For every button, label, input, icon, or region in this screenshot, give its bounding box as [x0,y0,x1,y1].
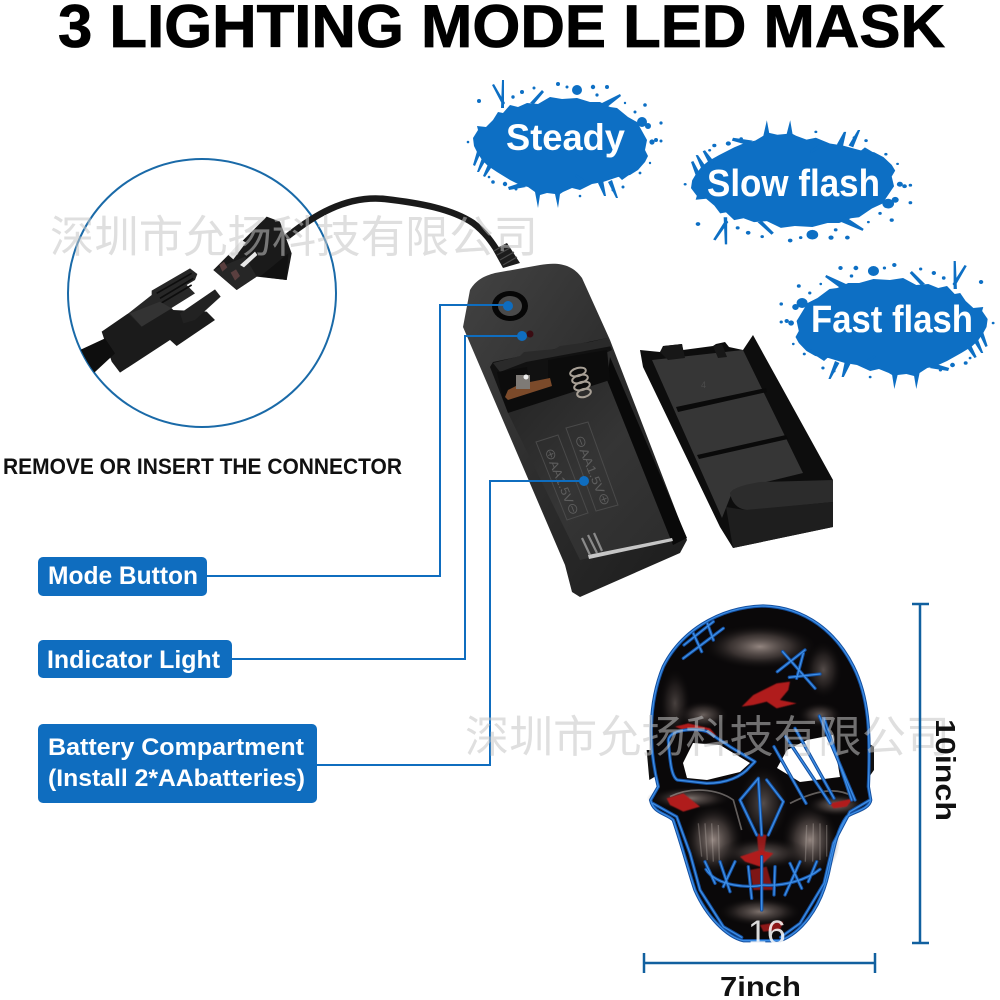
height label: 10inch [930,719,961,821]
watermark: bottom: 深圳市允扬科技有限公司 [465,713,950,762]
battery polarity markings: ⊕AA1.5V⊖ [541,446,581,518]
watermark: top: 深圳市允扬科技有限公司 [50,213,538,262]
icon: steady splat badge: Steady [506,117,625,158]
icon: slow flash splat badge [684,120,912,244]
icon: slow flash splat badge: Slow flash [707,163,880,205]
icon: mode button [492,291,528,321]
callout: indicator light label: Indicator Light [47,646,221,674]
battery box [463,264,687,597]
icon: male connector plug [80,268,221,377]
battery cover lid [640,335,833,548]
battery compartment cavity [508,380,673,560]
callout: battery compartment label [38,724,317,803]
battery contacts and spring [516,366,673,559]
icon: fast flash splat badge: Fast flash [811,299,973,341]
connector callout circle [68,159,336,427]
callout: battery compartment label: (Install 2*AAbatteries) [48,765,305,792]
icon: indicator LED [526,330,534,338]
battery polarity markings [536,422,618,520]
battery cover lid: 4 [701,380,706,390]
width dimension line [644,953,875,973]
arrow: battery compartment leader [317,476,589,765]
icon: steady splat badge [467,80,663,208]
icon: fast flash splat badge [779,261,995,389]
mask blood marks [667,682,853,932]
callout: indicator light label [38,640,232,678]
cable from connector to battery box [288,199,520,268]
connector caption: REMOVE OR INSERT THE CONNECTOR [3,454,402,479]
arrow: mode button leader [207,301,513,576]
watermark fragment: 16 [748,914,786,952]
arrow: indicator light leader [232,331,527,659]
callout: battery compartment label: Battery Compartment [48,734,304,761]
icon: female connector plug [213,217,292,290]
height dimension line [912,604,929,943]
battery polarity markings: ⊖AA1.5V⊕ [571,433,613,509]
icon: eye openings [683,735,840,782]
mask gloss highlights [647,623,868,927]
callout: mode button label [38,557,207,596]
skull LED mask [647,605,874,942]
callout: mode button label: Mode Button [48,562,198,590]
strap nubs [647,743,874,780]
LED wire lines [651,606,871,941]
